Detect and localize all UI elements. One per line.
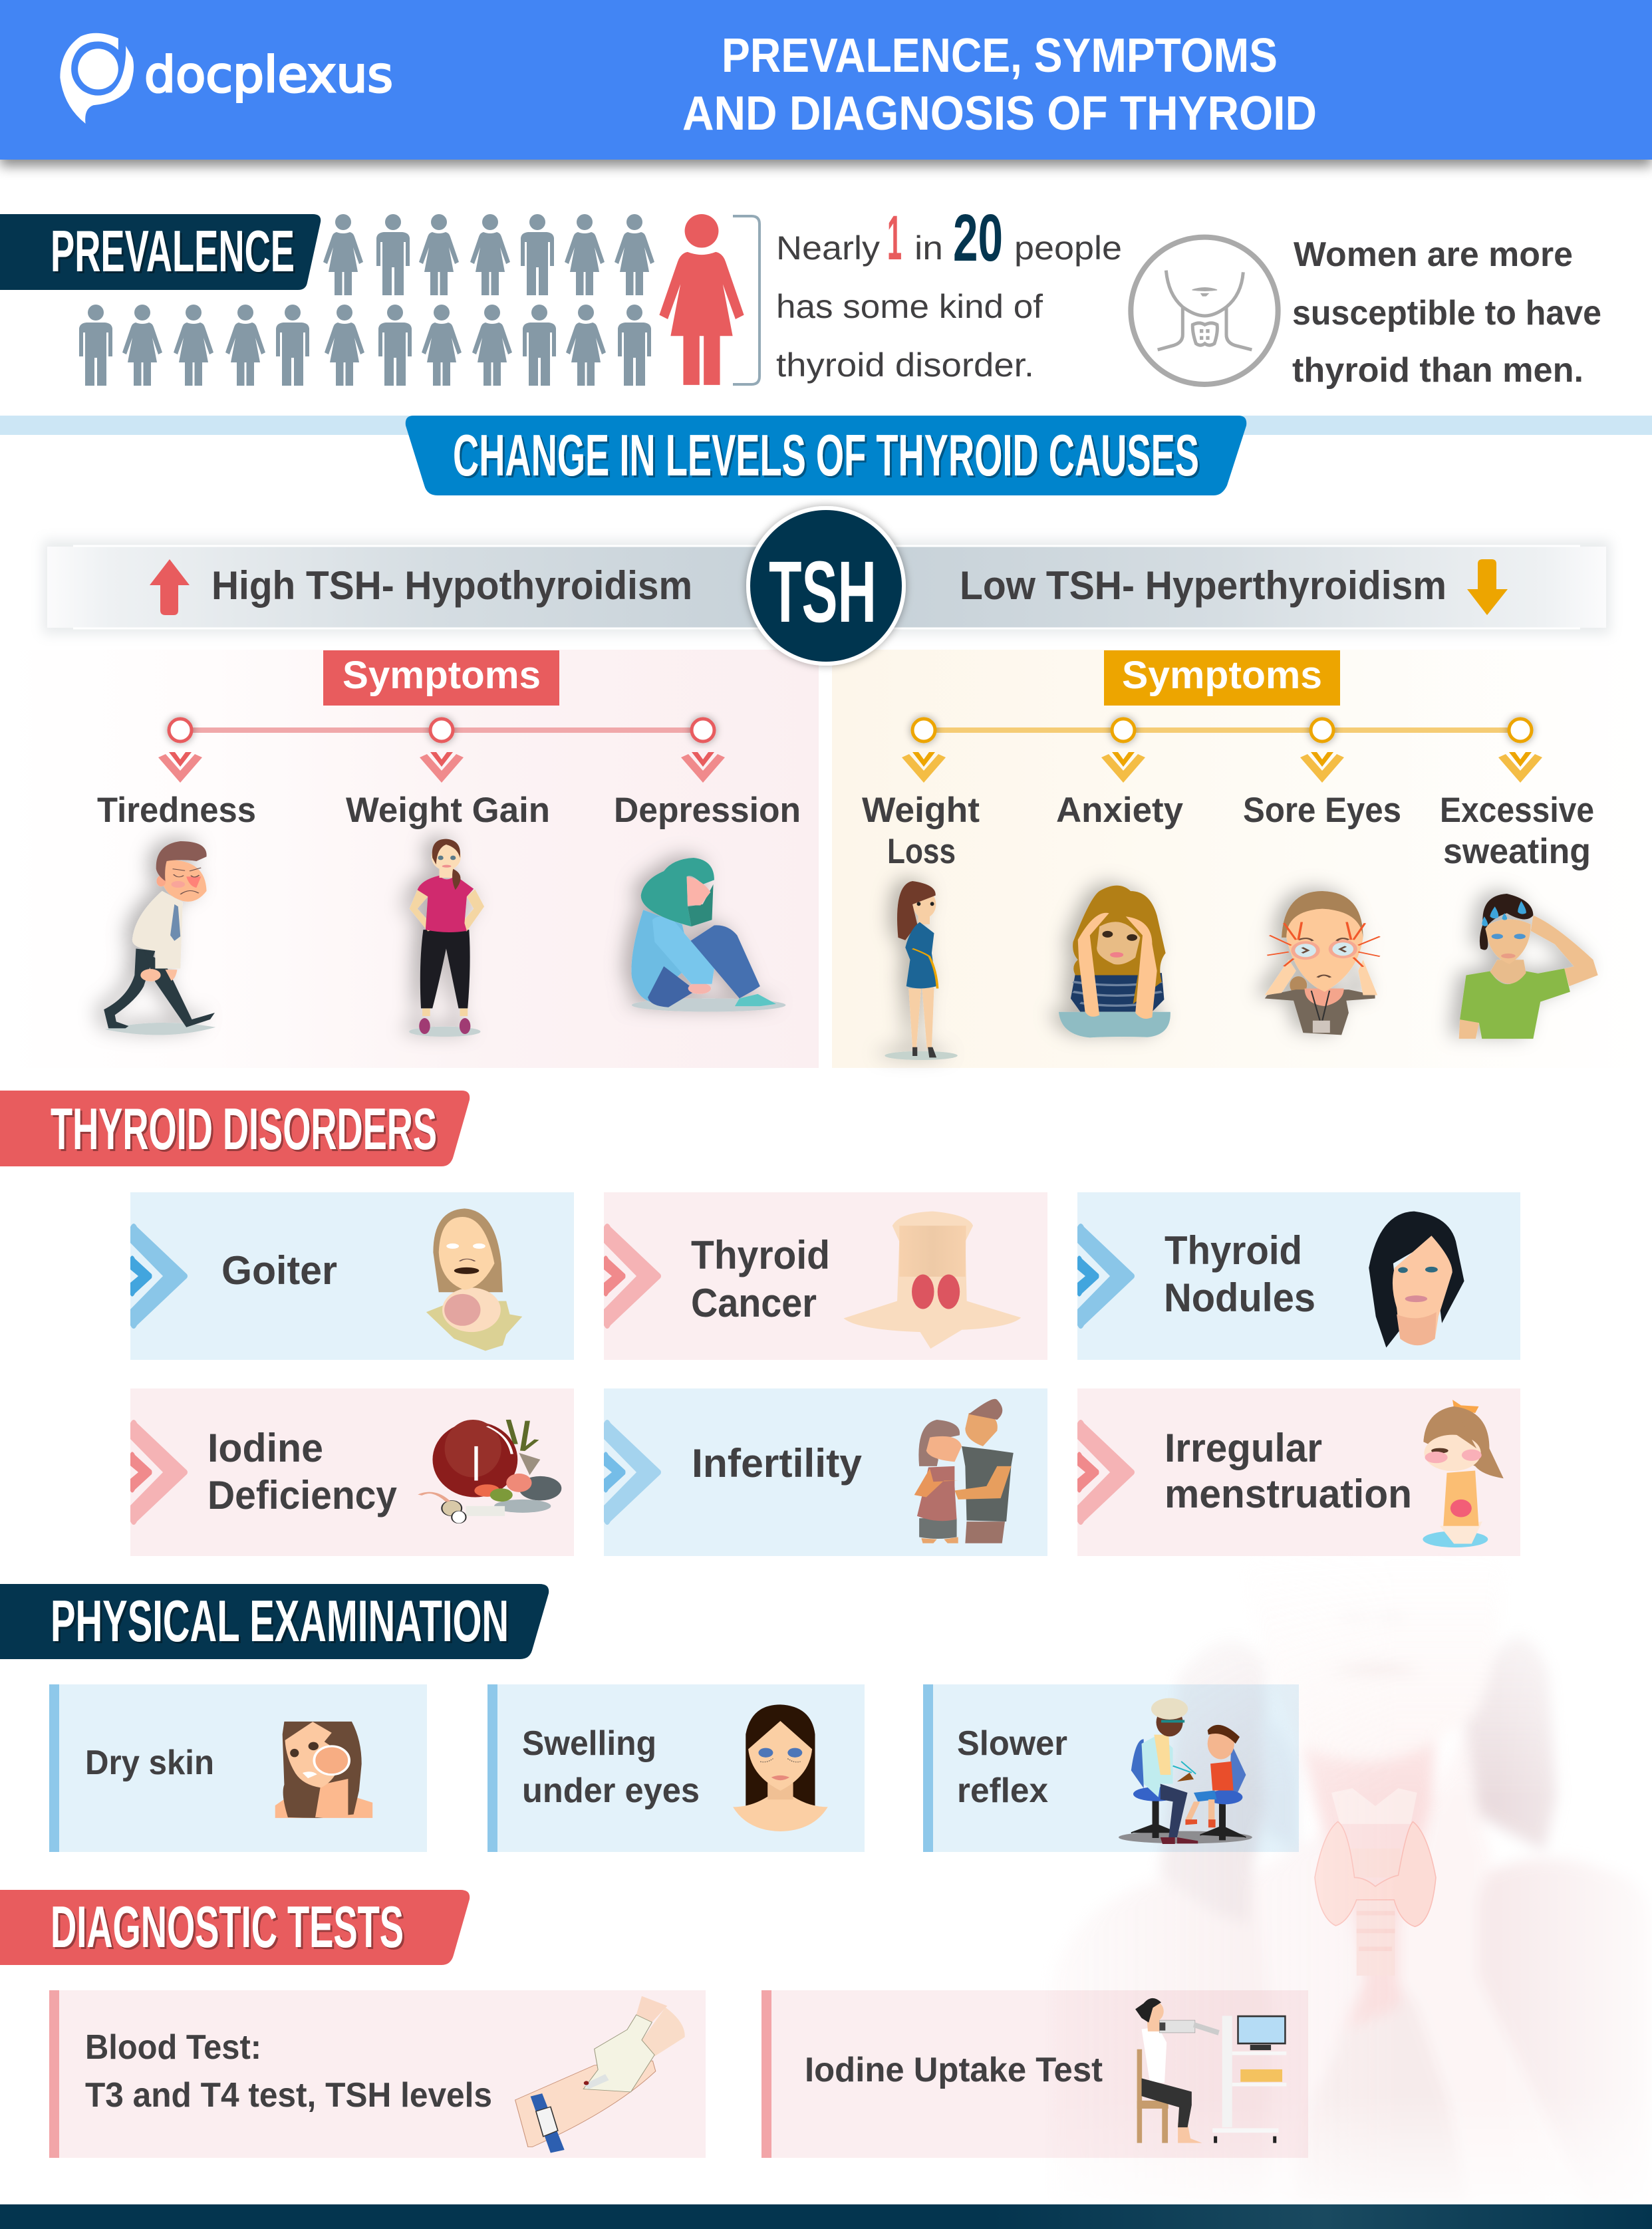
title: PREVALENCE, SYMPTOMS [722,29,1278,82]
text: 1 in 20 statistic: people [1014,229,1122,267]
footer bar [0,2204,1652,2229]
card: irregular menstruation: Irregular [1165,1426,1322,1470]
arrow: down [1467,559,1508,615]
card: swelling under eyes: Swelling [522,1724,656,1763]
figure: weight loss woman [885,881,958,1060]
icon: neck with thyroid in circle [1131,237,1278,384]
card: infertility [604,1388,1047,1556]
bracket [733,216,759,384]
card: swelling under eyes: under eyes [522,1771,700,1810]
symptom labels: Loss [887,832,956,871]
timeline: high TSH [158,719,725,783]
icon: arm blood draw [515,1996,685,2153]
title [682,29,1317,140]
banner: thyroid disorders: THYROID DISORDERS [51,1096,437,1162]
card: goiter: Goiter [221,1248,337,1293]
card: blood test [49,1990,706,2158]
text: women more susceptible: Women are more [1294,235,1573,274]
text: 1 in 20 statistic: in [914,229,943,267]
card: thyroid cancer [604,1192,1047,1360]
card: goiter [130,1192,574,1360]
text: 1 in 20 statistic [776,201,1122,384]
pictogram: 19 grey people [79,214,654,386]
symptom labels: sweating [1443,832,1591,871]
card: thyroid nodules [1077,1192,1520,1360]
symptom labels: Weight [862,791,980,830]
card: infertility: Infertility [692,1441,863,1486]
text: 1 in 20 statistic: thyroid disorder. [776,346,1034,384]
card: iodine uptake test: Iodine Uptake Test [805,2051,1103,2089]
card: blood test: Blood Test: [85,2028,261,2067]
figure: anxious woman [1059,886,1170,1037]
card: iodine deficiency [130,1388,574,1556]
banner: diagnostic tests [0,1890,470,1965]
TSH circle: TSH [769,543,877,640]
symptom labels: Weight Gain [346,791,550,830]
card: dry skin [49,1684,427,1852]
label: high TSH: High TSH- Hypothyroidism [211,563,692,608]
background fade: bottom edge [931,2095,1652,2204]
card: iodine deficiency: Deficiency [207,1473,398,1517]
icon: girl in pain [1423,1400,1504,1547]
timeline: low TSH [902,719,1542,783]
card: thyroid cancer: Cancer [691,1281,817,1325]
icon: iodine sphere and foods [420,1420,561,1523]
figure: tired man [104,841,215,1035]
icon: docplexus logo [60,33,134,124]
symptom labels: Excessive [1440,791,1594,830]
symptom labels: Sore Eyes [1243,791,1401,830]
label: symptoms orange [1104,650,1340,706]
card: slower reflex: reflex [957,1771,1048,1810]
card: slower reflex: Slower [957,1724,1067,1763]
icon: woman with dry skin [275,1722,372,1818]
figure: sweating woman [1459,894,1598,1039]
label: symptoms red [323,650,559,706]
card: iodine uptake test [761,1990,1308,2158]
icon: worried couple [914,1399,1014,1543]
text: women more susceptible [1292,235,1601,390]
banner: physical examination [0,1584,549,1659]
icon: goiter woman [426,1208,522,1351]
banner: prevalence [0,214,321,290]
figure: depressed girl [631,858,785,1011]
icon: woman portrait [733,1704,828,1831]
card: thyroid nodules: Thyroid [1165,1228,1302,1273]
card: thyroid cancer: Thyroid [691,1233,830,1277]
text: women more susceptible: susceptible to have [1292,294,1601,332]
icon: doctor testing boy's reflex [1119,1698,1252,1844]
banner: prevalence: PREVALENCE [51,218,295,284]
panel: high TSH symptoms background [0,650,819,1068]
symptom labels: Tiredness [97,791,256,830]
card: dry skin: Dry skin [85,1744,214,1782]
icon: neck with thyroid [844,1212,1021,1349]
text: 1 in 20 statistic: Nearly [776,229,880,267]
card: swelling under eyes [487,1684,865,1852]
panel: low TSH symptoms background [832,650,1652,1068]
logo wordmark: docplexus [144,47,393,104]
text: 1 in 20 statistic: 20 [953,201,1003,275]
icon: highlighted red woman [659,214,744,385]
TSH bar [43,540,1611,634]
TSH circle [748,508,904,664]
card: blood test: T3 and T4 test, TSH levels [85,2076,492,2115]
text: 1 in 20 statistic: 1 [887,203,902,273]
symptom labels: Anxiety [1056,791,1184,830]
title: AND DIAGNOSIS OF THYROID [682,87,1317,140]
figure: sore eyes woman [1265,891,1380,1035]
banner: physical examination: PHYSICAL EXAMINATION [51,1588,509,1654]
background: faded throat photo [1125,1640,1616,2177]
symptom labels: Depression [614,791,801,830]
icon: dark-haired woman [1369,1212,1464,1347]
card: iodine deficiency: Iodine [207,1426,323,1470]
text: women more susceptible: thyroid than men. [1292,351,1583,390]
band behind banner [0,416,1652,435]
card: irregular menstruation [1077,1388,1520,1556]
banner: change in levels: CHANGE IN LEVELS OF THYROID CAUSES [453,422,1199,488]
banner: change in levels [406,416,1246,495]
banner: diagnostic tests: DIAGNOSTIC TESTS [51,1894,404,1960]
icon: woman at uptake scanner [1135,1998,1286,2143]
label: symptoms red: Symptoms [343,654,541,697]
text: 1 in 20 statistic: has some kind of [776,288,1043,325]
card: irregular menstruation: menstruation [1165,1472,1412,1516]
header bar [0,0,1652,160]
card: thyroid nodules: Nodules [1164,1275,1315,1320]
arrow: up [150,559,190,615]
label: low TSH: Low TSH- Hyperthyroidism [960,563,1446,608]
banner: thyroid disorders [0,1091,470,1166]
card: slower reflex [923,1684,1299,1852]
label: symptoms orange: Symptoms [1122,654,1322,697]
background fade: right edge [1496,1556,1652,2204]
symptom labels [97,791,1594,871]
figure: woman weight gain [409,839,484,1037]
